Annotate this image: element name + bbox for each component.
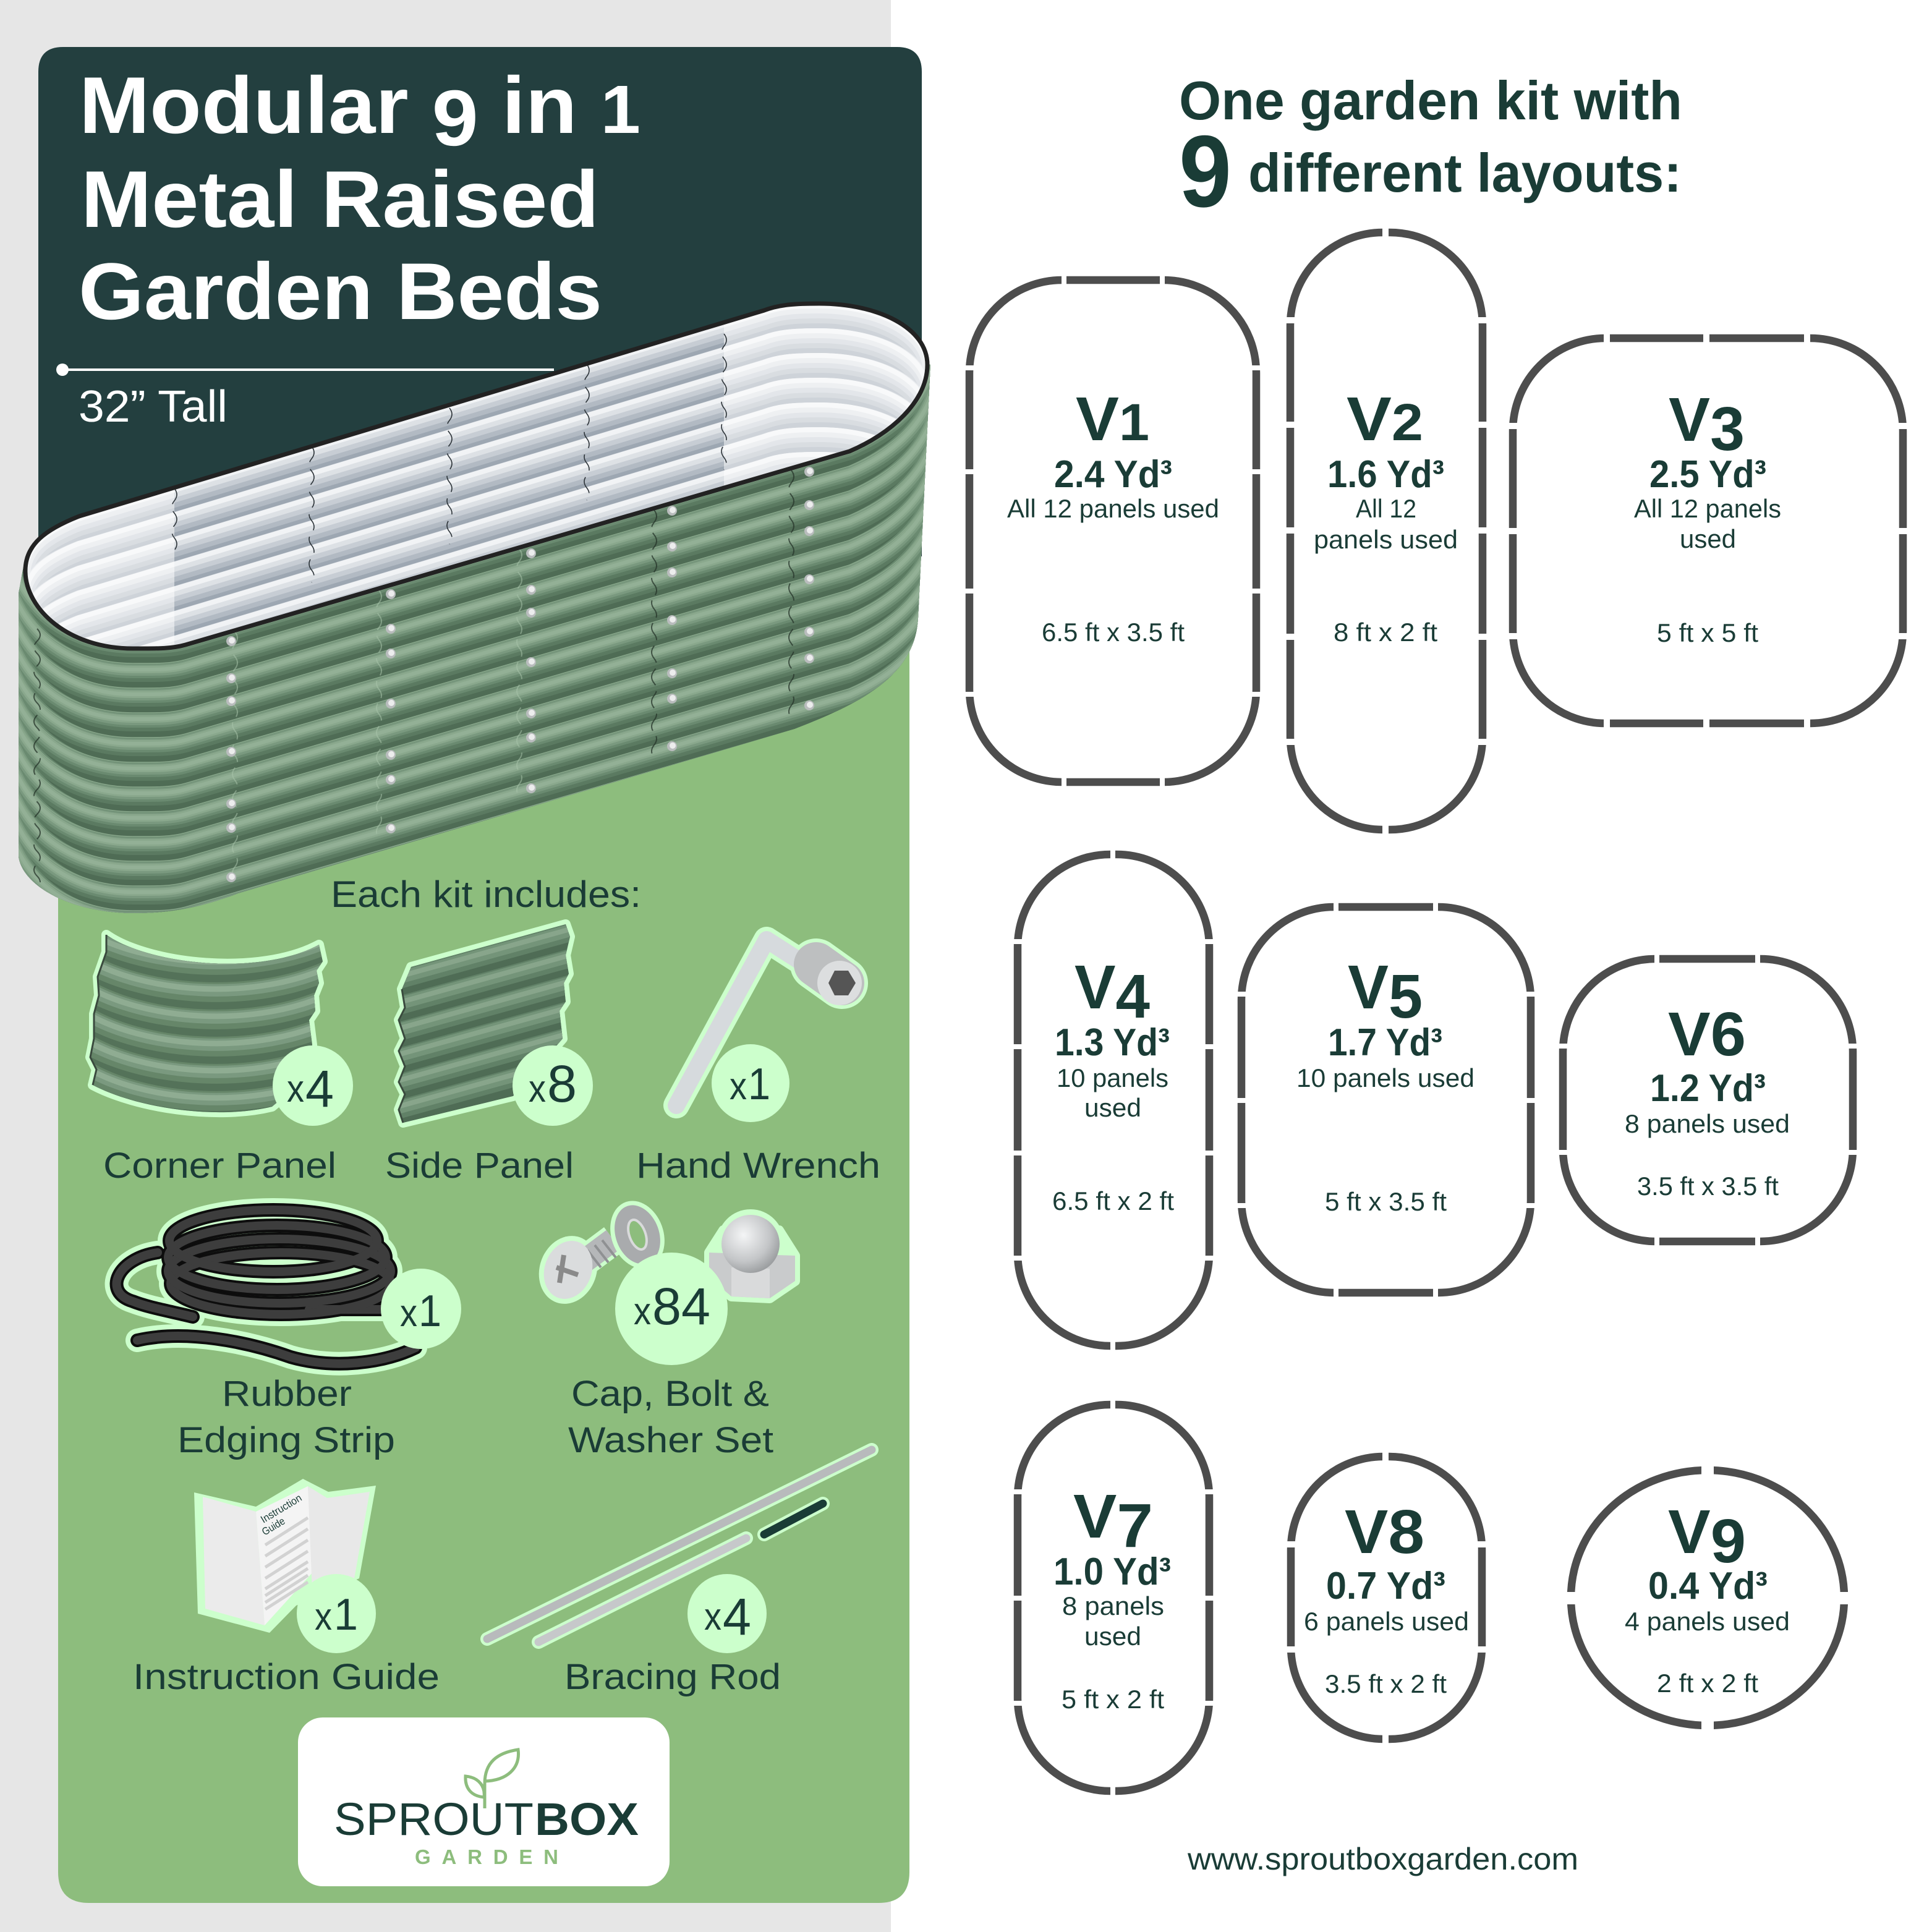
panel: kit contents (green) — [58, 495, 909, 1903]
V4 volume: 1.3 Yd³ — [1055, 1021, 1170, 1064]
label: rubber edging strip: Rubber — [222, 1374, 352, 1414]
V9 panels: 4 panels used — [1625, 1607, 1790, 1636]
label: hand wrench: Hand Wrench — [636, 1146, 880, 1186]
V3 volume: 2.5 Yd³ — [1649, 453, 1766, 496]
V8 name: V8 — [1345, 1497, 1424, 1567]
badge: hardware quantity — [615, 1253, 728, 1365]
badge: rod quantity: 4 — [723, 1588, 751, 1646]
bed bolts — [226, 467, 814, 882]
heading: layouts: 9 — [1179, 114, 1232, 228]
illustration: raised garden bed — [19, 302, 930, 913]
V2 panels — [1314, 494, 1458, 554]
V3 name: 3 — [1710, 394, 1745, 464]
V8 panels: 6 panels used — [1304, 1607, 1469, 1636]
V9 name: V — [1668, 1497, 1709, 1567]
panel: layout V3 — [1507, 332, 1909, 730]
badge: guide quantity: 1 — [334, 1590, 358, 1640]
washer — [601, 1193, 674, 1276]
V7 panels: 8 panels — [1062, 1591, 1164, 1620]
V8 size: 3.5 ft x 2 ft — [1325, 1669, 1447, 1698]
icon: instruction guide: Guide — [260, 1515, 287, 1538]
badge: guide quantity — [297, 1574, 376, 1653]
V3 size: 5 ft x 5 ft — [1657, 618, 1758, 647]
panel: layout V8 — [1285, 1450, 1488, 1745]
icon: instruction guide — [194, 1479, 376, 1633]
V2 panels: All 12 — [1356, 494, 1416, 523]
panel: layout V2 — [1284, 226, 1489, 836]
V7 panels: used — [1084, 1622, 1141, 1651]
label: instruction guide: Instruction Guide — [133, 1657, 440, 1697]
icon: rubber edging strip — [117, 1210, 415, 1364]
V5 size: 5 ft x 3.5 ft — [1325, 1187, 1447, 1216]
bolt — [530, 1228, 616, 1312]
V6 name: V6 — [1668, 1000, 1746, 1069]
heading: layouts — [1179, 70, 1682, 228]
panel: layout V5 — [1235, 901, 1537, 1299]
panel: layout V6 — [1557, 953, 1859, 1248]
logo: Sproutbox Garden: BOX — [535, 1794, 639, 1845]
V4 size: 6.5 ft x 2 ft — [1052, 1186, 1174, 1215]
V7 panels — [1062, 1591, 1164, 1651]
height indicator line — [56, 364, 554, 376]
V2 size: 8 ft x 2 ft — [1334, 618, 1437, 647]
V6 panels: 8 panels used — [1625, 1109, 1790, 1138]
label: bracing rod: Bracing Rod — [564, 1657, 781, 1697]
V4 panels: used — [1084, 1093, 1141, 1122]
title: Garden Beds — [79, 246, 602, 336]
website url: www.sproutboxgarden.com — [1187, 1842, 1578, 1876]
badge: guide quantity: x — [315, 1596, 332, 1638]
badge: wrench quantity: x — [730, 1065, 747, 1108]
V4 panels: 10 panels — [1057, 1063, 1168, 1092]
background: grey column — [0, 0, 891, 1932]
V9 volume: 0.4 Yd³ — [1648, 1565, 1768, 1607]
V3 name: V — [1669, 385, 1710, 454]
V7 size: 5 ft x 2 ft — [1062, 1685, 1164, 1714]
V8 volume: 0.7 Yd³ — [1326, 1565, 1445, 1607]
V2 volume: 1.6 Yd³ — [1327, 453, 1444, 496]
heading: layouts: different layouts: — [1248, 142, 1682, 203]
V5 name: 5 — [1389, 962, 1423, 1031]
badge: hardware quantity: 84 — [652, 1277, 710, 1335]
icon: side panel — [396, 924, 581, 1123]
kit heading: Each kit includes: — [331, 874, 641, 915]
badge: hardware quantity: x — [634, 1290, 651, 1333]
label: corner panel: Corner Panel — [103, 1146, 336, 1186]
badge: rubber strip quantity: 1 — [419, 1287, 441, 1336]
bed rim — [25, 304, 927, 649]
V1 size: 6.5 ft x 3.5 ft — [1042, 618, 1185, 647]
logo: Sproutbox Garden: GARDEN — [415, 1845, 558, 1868]
icon: cap, bolt and washer — [530, 1193, 795, 1312]
V1 volume: 2.4 Yd³ — [1054, 453, 1172, 496]
badge: corner panel quantity: 4 — [305, 1060, 334, 1118]
badge: corner panel quantity: x — [287, 1068, 304, 1110]
label: cap, bolt and washer set: Cap, Bolt & — [571, 1374, 769, 1414]
logo: Sproutbox Garden — [298, 1717, 670, 1886]
panel: layout V4 — [1011, 848, 1215, 1352]
V4 name: V — [1075, 953, 1116, 1022]
badge: side panel quantity: 8 — [547, 1055, 577, 1113]
V4 panels — [1057, 1063, 1168, 1122]
title: 9 — [432, 74, 479, 163]
cap nut — [709, 1209, 795, 1298]
V5 volume: 1.7 Yd³ — [1328, 1021, 1442, 1064]
badge: wrench quantity — [712, 1044, 789, 1122]
badge: rubber strip quantity: x — [400, 1292, 417, 1335]
label: rubber edging strip: Edging Strip — [177, 1420, 395, 1460]
V6 volume: 1.2 Yd³ — [1650, 1067, 1766, 1110]
V2 name: V2 — [1347, 385, 1423, 454]
icon: sprout — [466, 1750, 518, 1808]
icon: bracing rods — [487, 1450, 872, 1642]
V6 size: 3.5 ft x 3.5 ft — [1637, 1172, 1779, 1201]
panel: layout V1 — [963, 274, 1262, 788]
title — [79, 60, 640, 336]
V7 name: V — [1073, 1482, 1115, 1551]
icon: corner panel — [80, 928, 334, 1112]
bed interior wall — [27, 305, 925, 647]
logo: Sproutbox Garden: SPROUT — [334, 1794, 534, 1845]
V1 name: V1 — [1076, 385, 1149, 454]
V3 panels — [1634, 494, 1781, 553]
badge: rod quantity: x — [704, 1596, 721, 1638]
badge: side panel quantity: x — [529, 1068, 546, 1110]
title: 1 — [601, 72, 640, 148]
V9 size: 2 ft x 2 ft — [1657, 1669, 1758, 1698]
title: Modular — [79, 60, 392, 150]
V3 panels: used — [1680, 524, 1736, 553]
title: Metal Raised — [81, 154, 599, 244]
label: rubber edging strip — [177, 1374, 395, 1460]
icon: instruction guide: Instruction — [258, 1492, 304, 1525]
badge: corner panel quantity — [273, 1045, 353, 1126]
title: in — [479, 60, 601, 150]
panel: title (dark) — [38, 47, 922, 556]
V3 panels: All 12 panels — [1634, 494, 1781, 523]
label: side panel: Side Panel — [385, 1146, 574, 1186]
label: cap, bolt and washer set: Washer Set — [568, 1420, 773, 1460]
panel: layout V9 — [1565, 1464, 1850, 1732]
V7 volume: 1.0 Yd³ — [1053, 1551, 1171, 1593]
V9 name: 9 — [1711, 1507, 1746, 1576]
icon: hand wrench — [676, 940, 862, 1105]
label: cap, bolt and washer set — [568, 1374, 773, 1460]
V4 name: 4 — [1116, 962, 1150, 1031]
badge: side panel quantity — [513, 1045, 593, 1126]
V7 name: 7 — [1117, 1491, 1153, 1560]
bed exterior wall — [19, 365, 930, 913]
V5 name: V — [1348, 953, 1389, 1022]
panel: layout V7 — [1011, 1398, 1215, 1797]
heading: layouts: One garden kit with — [1179, 70, 1682, 131]
V2 panels: panels used — [1314, 525, 1458, 554]
V5 panels: 10 panels used — [1296, 1063, 1475, 1092]
V1 panels: All 12 panels used — [1007, 494, 1219, 523]
height label: 32” Tall — [79, 382, 228, 432]
badge: rod quantity — [687, 1574, 767, 1653]
badge: wrench quantity: 1 — [748, 1060, 770, 1109]
badge: rubber strip quantity — [381, 1269, 461, 1349]
